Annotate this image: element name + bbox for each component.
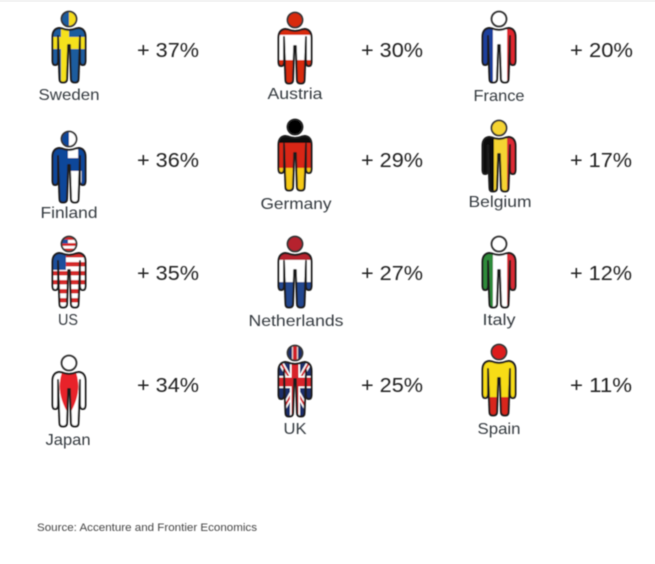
icon: Spain figure: [481, 344, 517, 418]
entry: US: [51, 236, 199, 329]
value: US: + 35%: [137, 263, 199, 285]
value: Spain: + 11%: [570, 375, 632, 397]
label: Finland: Finland: [40, 205, 98, 222]
entry: Austria: [268, 12, 423, 103]
entry: Italy: [481, 236, 632, 329]
icon: France figure: [481, 12, 517, 85]
source note: Source: Accenture and Frontier Economics: [37, 522, 258, 534]
entry: France: [474, 12, 633, 105]
value: Netherlands: + 27%: [361, 263, 423, 285]
icon: Japan figure: [51, 356, 87, 429]
label: France: France: [474, 88, 525, 105]
entry: Japan: [46, 356, 199, 449]
entry: Netherlands: [248, 236, 423, 330]
icon: Belgium figure: [481, 120, 517, 194]
label: Germany: Germany: [260, 196, 332, 213]
value: Japan: + 34%: [137, 375, 199, 397]
entry: Spain: [478, 344, 632, 438]
value: France: + 20%: [570, 40, 633, 62]
label: Netherlands: Netherlands: [248, 313, 344, 330]
value: Sweden: + 37%: [137, 40, 199, 62]
icon: UK figure: [277, 345, 313, 419]
entry: Belgium: [468, 120, 632, 211]
value: Finland: + 36%: [137, 150, 199, 172]
entry: Germany: [260, 120, 423, 213]
label: Italy: Italy: [482, 312, 516, 329]
label: Spain: Spain: [478, 421, 520, 438]
icon: Finland figure: [51, 131, 87, 205]
icon: Italy figure: [481, 236, 517, 310]
value: UK: + 25%: [361, 375, 423, 397]
icon: US figure: [51, 236, 87, 310]
label: Sweden: Sweden: [38, 87, 100, 104]
icon: Netherlands figure: [277, 236, 313, 310]
value: Italy: + 12%: [570, 263, 632, 285]
value: Austria: + 30%: [361, 40, 423, 62]
label: US: US: [58, 312, 78, 329]
value: Belgium: + 17%: [570, 150, 632, 172]
label: Austria: Austria: [268, 86, 323, 103]
label: UK: UK: [284, 421, 307, 438]
icon: Sweden figure: [51, 11, 87, 85]
entry: UK: [277, 345, 423, 438]
label: Japan: Japan: [46, 432, 90, 449]
icon: Germany figure: [277, 120, 313, 193]
value: Germany: + 29%: [361, 150, 423, 172]
entry: Finland: [40, 131, 199, 222]
entry: Sweden: [38, 11, 199, 104]
label: Belgium: Belgium: [468, 194, 532, 211]
icon: Austria figure: [277, 12, 313, 86]
